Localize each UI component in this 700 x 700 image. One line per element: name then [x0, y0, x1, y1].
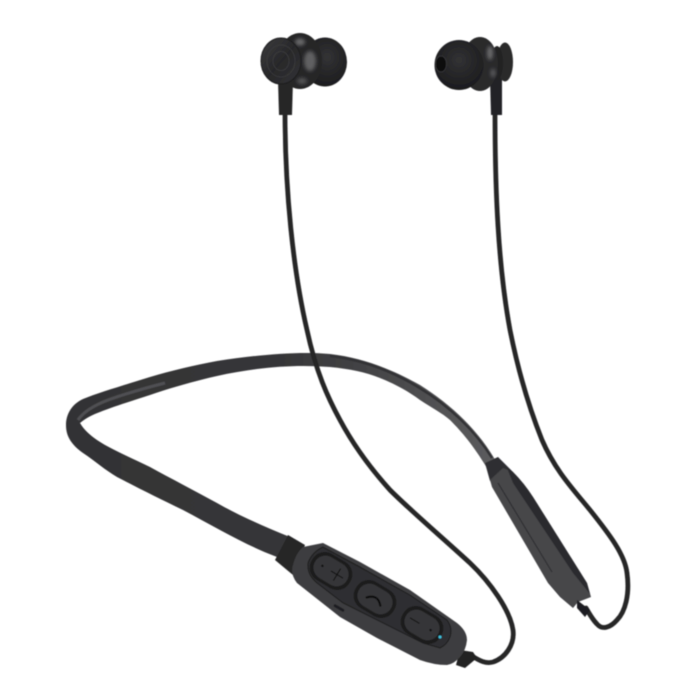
right flange — [497, 42, 513, 82]
right housing highlights — [487, 46, 496, 78]
box end cap — [577, 600, 590, 617]
band top edge shading — [330, 356, 492, 458]
box seam — [498, 483, 552, 572]
control remote — [275, 535, 477, 668]
volume up button — [304, 547, 358, 595]
left brushed disc — [261, 38, 301, 84]
left ear tip — [303, 38, 347, 86]
remote inset panel — [308, 547, 451, 648]
remote body — [292, 543, 467, 665]
remote cable plug — [456, 650, 477, 668]
box collar — [485, 457, 513, 481]
right earbud — [434, 37, 513, 115]
band surface — [66, 353, 497, 557]
right ear tip — [434, 40, 484, 90]
right neck — [491, 46, 503, 80]
right housing — [462, 37, 498, 91]
right cable — [495, 112, 628, 627]
side slot — [333, 604, 345, 612]
box body — [490, 468, 591, 608]
band corner facet — [78, 383, 165, 420]
left housing highlights — [295, 38, 316, 84]
neckband — [66, 353, 497, 557]
right stem — [490, 74, 502, 115]
right ear tip opening — [436, 56, 446, 72]
remote collar — [275, 535, 305, 575]
left cable — [285, 112, 513, 663]
blue LED — [438, 636, 442, 638]
left housing — [278, 33, 322, 89]
left earbud — [261, 33, 347, 115]
box side facet — [507, 468, 590, 594]
volume down button — [395, 601, 449, 649]
call button — [348, 575, 402, 623]
right control box — [485, 457, 591, 617]
left stem — [278, 80, 293, 115]
